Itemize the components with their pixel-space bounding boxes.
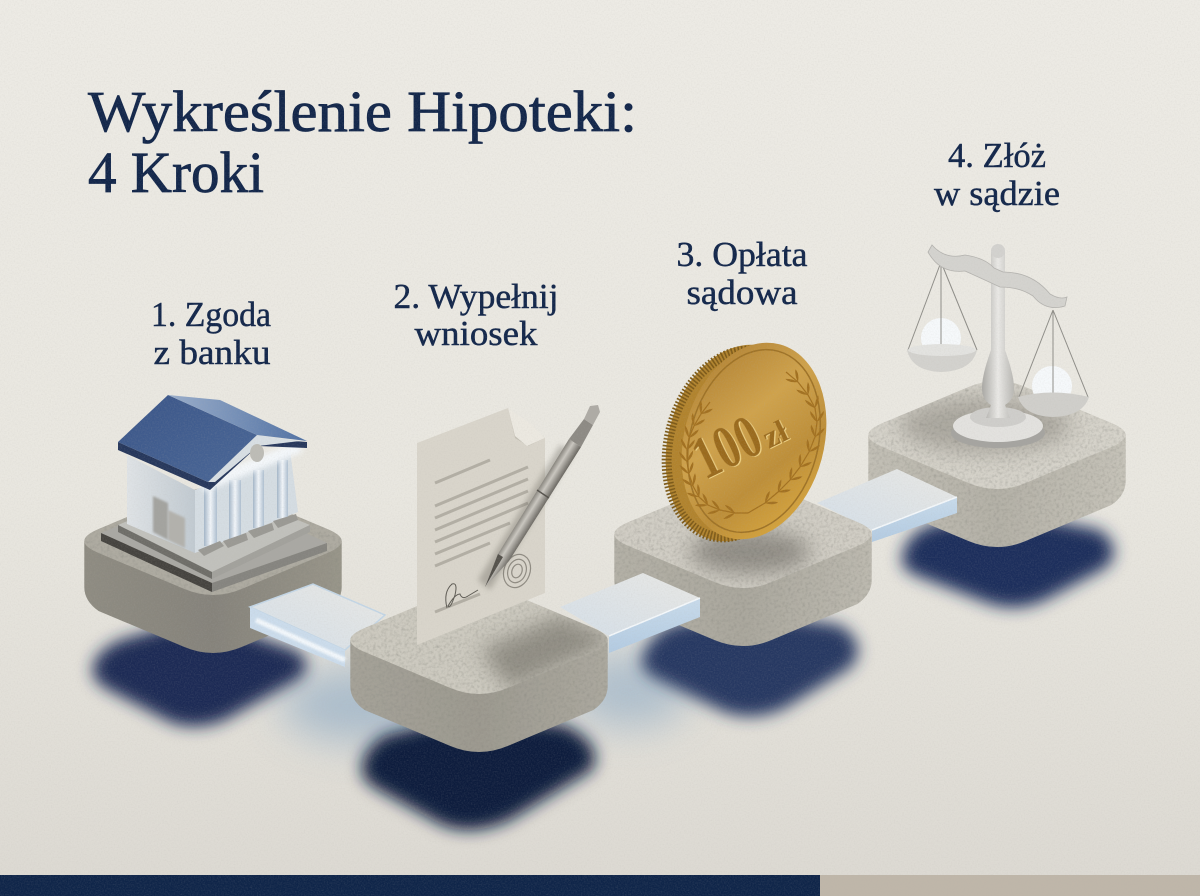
- step 3 label: 3. Opłata: [676, 236, 808, 274]
- icon: document with signature: [417, 408, 545, 645]
- platform 1: concrete block: [84, 487, 342, 653]
- seal: [499, 551, 535, 591]
- title: 4 Kroki: [88, 140, 264, 205]
- ground shadows and blue glow: [92, 510, 1114, 830]
- base: [951, 418, 1045, 448]
- step 1 label: z banku: [154, 334, 270, 372]
- shadow under document: [480, 615, 620, 690]
- icon: pen: [478, 405, 600, 590]
- icon: gold coin 100 zł: [645, 326, 847, 558]
- shadow under coin: [690, 530, 810, 574]
- left pan: [907, 262, 977, 372]
- text lines on document: [435, 460, 528, 612]
- step 1 label: [151, 296, 271, 372]
- step 3 label: [676, 236, 808, 312]
- right pan: [1018, 310, 1089, 417]
- coin value: zł: [756, 412, 794, 455]
- bottom colour bar: [0, 875, 1200, 896]
- platform 2: concrete block: [350, 586, 608, 752]
- title: Wykreślenie Hipoteki:: [88, 79, 637, 144]
- step 4 label: 4. Złóż: [948, 137, 1046, 175]
- step 1 label: 1. Zgoda: [151, 296, 271, 334]
- column: [982, 252, 1014, 418]
- coin value: 100: [682, 403, 772, 492]
- icon: bank building: [101, 395, 327, 592]
- step 4 label: w sądzie: [934, 175, 1060, 213]
- step 2 label: [394, 278, 558, 353]
- platform 3: concrete block: [614, 480, 872, 646]
- glass connector 3 to 4: [817, 469, 957, 542]
- step 4 label: [934, 137, 1060, 213]
- step 3 label: sądowa: [686, 274, 798, 312]
- laurel wreath: [687, 402, 748, 513]
- step 2 label: wniosek: [414, 315, 538, 353]
- signature: [446, 584, 478, 608]
- glass connector 1 to 2: [250, 584, 385, 667]
- title: [88, 79, 637, 205]
- beam: [928, 245, 1067, 308]
- step 2 label: 2. Wypełnij: [394, 278, 558, 316]
- shadow under scales base: [900, 397, 1070, 453]
- glass connector 2 to 3: [560, 573, 700, 653]
- icon: marble scales of justice: [907, 244, 1089, 448]
- platform 4: concrete block: [868, 381, 1126, 547]
